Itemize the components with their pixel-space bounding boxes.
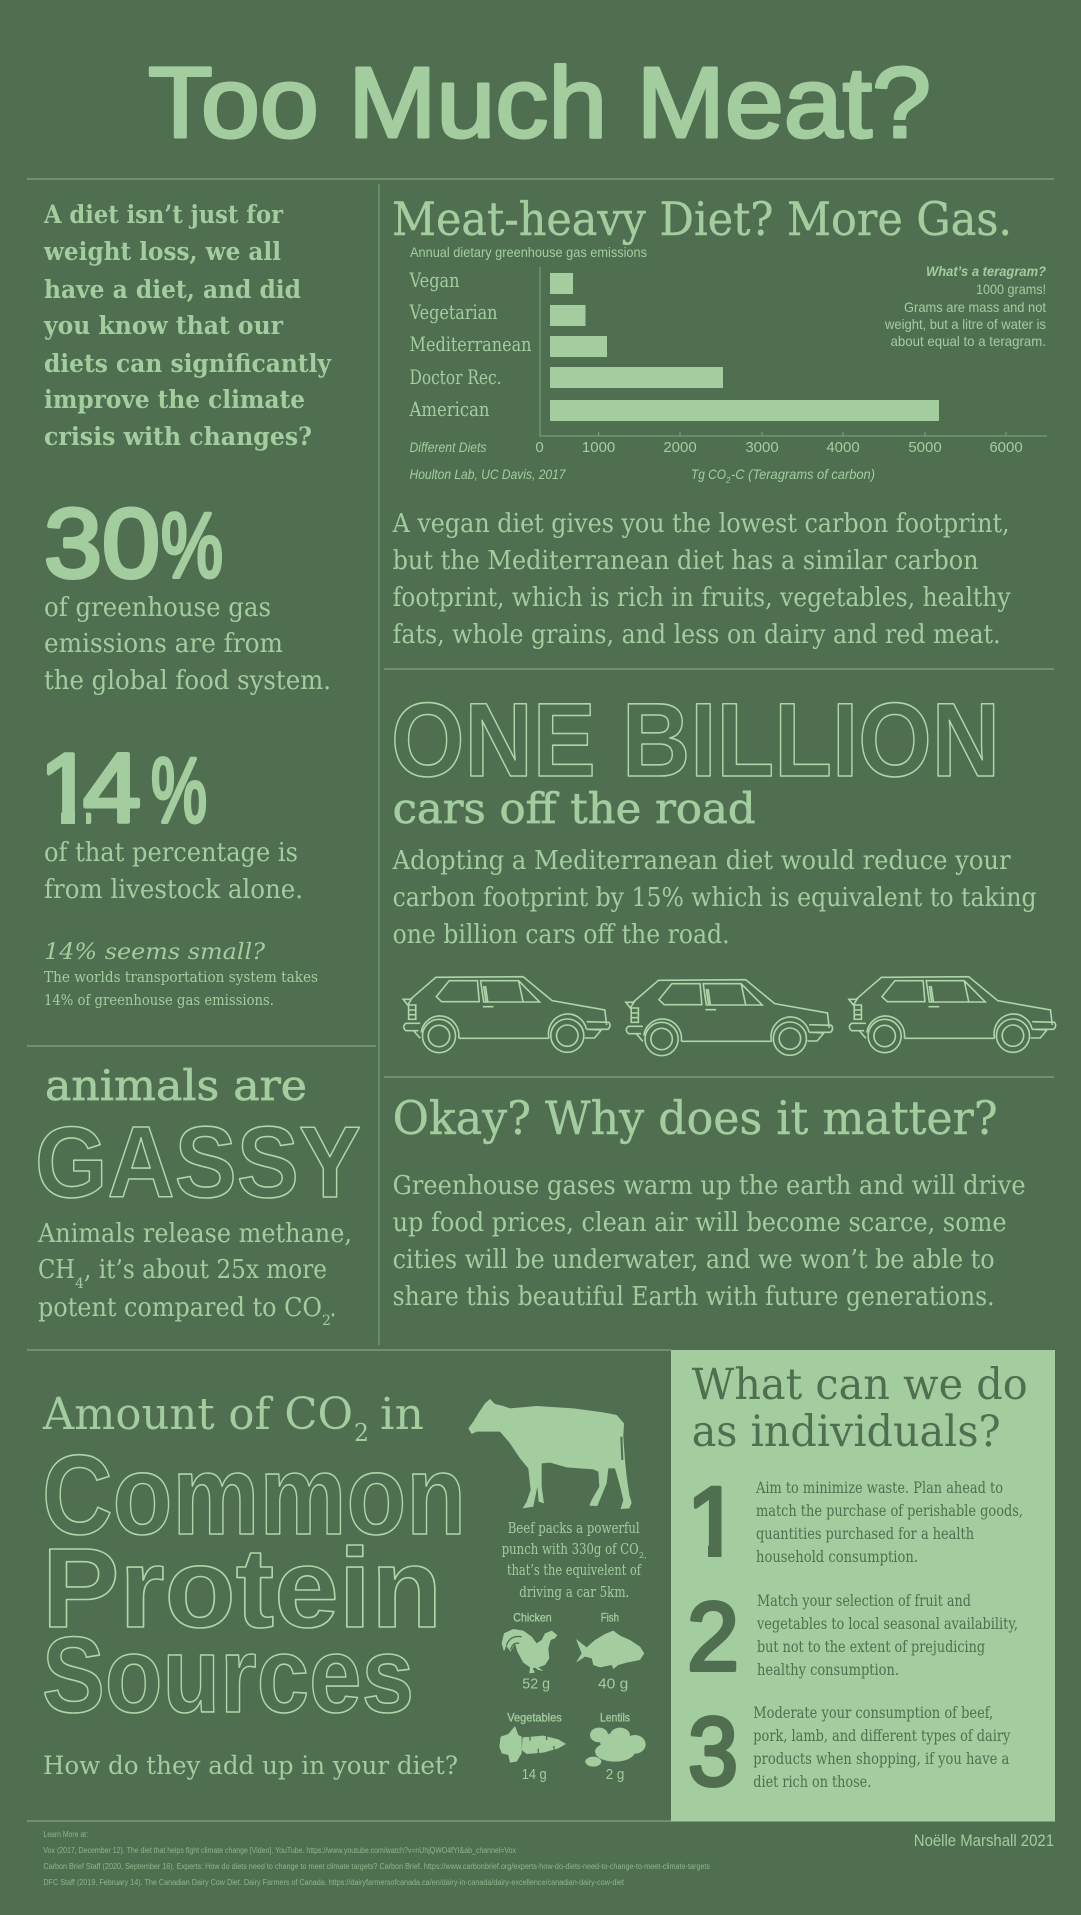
callout: what's a teragram: Grams are mass and not	[904, 299, 1046, 315]
step 2: but not to the extent of prejudicing	[757, 1638, 985, 1656]
text block: greenhouse gases: Greenhouse gases warm up the earth and will drive	[393, 1171, 1026, 1201]
axis tick labels: 4000	[826, 439, 860, 456]
outlined heading: common protein sources	[42, 1432, 466, 1735]
axis captions: 2	[725, 476, 731, 485]
panel heading: What can we do	[692, 1360, 1028, 1410]
axis tick labels: 0	[535, 439, 544, 456]
protein item: vegetables: 14 g	[522, 1766, 547, 1783]
sources list	[43, 1830, 710, 1887]
intro text block: A diet isn’t just for	[43, 200, 284, 229]
outlined heading: gassy: GASSY	[35, 1107, 361, 1219]
icon: car	[403, 977, 610, 1053]
text block: greenhouse gases: up food prices, clean air will become scarce, some	[393, 1208, 1007, 1238]
title: Too Much Meat?	[148, 47, 931, 159]
callout: what's a teragram	[884, 263, 1046, 349]
panel heading: as individuals?	[692, 1407, 1001, 1457]
sources list: Carbon Brief Staff (2020, September 16). Experts: How do diets need to change to meet climate targets? Carbon Brief. https://www.carbonbrief.org/experts-how-do-diets-need-to-change-to-meet-climate-targets	[43, 1862, 710, 1871]
intro text block: weight loss, we all	[43, 237, 281, 266]
bars	[550, 273, 939, 421]
outlined heading: common protein sources: Common	[42, 1432, 466, 1558]
step 1	[684, 1467, 1023, 1576]
methane text block	[37, 1219, 352, 1329]
step 2: Match your selection of fruit and	[757, 1592, 971, 1610]
category labels: American	[409, 397, 490, 421]
text block: mediterranean diet	[392, 846, 1037, 950]
callout: what's a teragram: 1000 grams!	[976, 281, 1046, 297]
protein item: chicken: 52 g	[522, 1676, 550, 1692]
axis tick labels: 5000	[908, 439, 942, 456]
protein item: fish	[576, 1610, 644, 1692]
stat: 14 percent: 4	[83, 733, 141, 843]
sources list: Learn More at:	[43, 1830, 88, 1839]
text block: vegan diet	[392, 509, 1011, 650]
step 3: 3	[688, 1697, 738, 1806]
protein item: vegetables: Vegetables	[507, 1711, 562, 1725]
heading: amount of CO2: in	[380, 1389, 424, 1440]
callout: 14 percent seems small: 14% of greenhouse gas emissions.	[44, 991, 274, 1009]
text block: beef: that’s the equivelent of	[507, 1561, 642, 1579]
callout: 14 percent seems small: 14% seems small?	[44, 940, 265, 965]
axes	[540, 267, 1047, 436]
stat: 14 percent: of that percentage is	[44, 838, 298, 868]
text block: vegan diet: but the Mediterranean diet has a similar carbon	[393, 546, 979, 576]
stat: 14 percent: %	[151, 740, 207, 842]
protein item: chicken: Chicken	[513, 1610, 552, 1624]
panel: animals are gassy	[35, 1061, 361, 1329]
icon: three cars	[403, 977, 1056, 1056]
text block: vegan diet: footprint, which is rich in fruits, vegetables, healthy	[393, 583, 1011, 613]
text block: beef: Beef packs a powerful	[508, 1519, 640, 1537]
text block: greenhouse gases: share this beautiful Earth with future generations.	[393, 1282, 995, 1312]
protein item: lentils: 2 g	[606, 1766, 624, 1783]
outlined heading: one billion: ONE BILLION	[391, 682, 1000, 799]
category labels: Vegan	[409, 268, 460, 292]
stat: 30 percent	[44, 488, 331, 696]
icon: car	[849, 977, 1056, 1053]
text block: beef: 2,	[639, 1551, 647, 1560]
step 3: diet rich on those.	[753, 1773, 871, 1791]
step 3: products when shopping, if you have a	[753, 1750, 1009, 1768]
category labels: Vegetarian	[409, 300, 498, 324]
outlined heading: common protein sources: Protein	[42, 1525, 442, 1651]
text block: vegan diet: A vegan diet gives you the lowest carbon footprint,	[392, 509, 1010, 539]
step 1: household consumption.	[756, 1548, 918, 1566]
heading: why does it matter: Okay? Why does it matter?	[393, 1091, 998, 1145]
step 2: 2	[687, 1582, 739, 1691]
chart title: Annual dietary greenhouse gas emissions	[410, 244, 647, 260]
icon: cow	[468, 1399, 632, 1509]
step 1: match the purchase of perishable goods,	[756, 1502, 1023, 1520]
methane text block: 2	[322, 1313, 331, 1329]
intro text block: have a diet, and did	[44, 275, 301, 304]
text block: mediterranean diet: one billion cars off the road.	[393, 920, 730, 950]
protein item: lentils	[585, 1711, 646, 1783]
axis captions: Different Diets	[410, 439, 486, 455]
axis tick labels	[535, 439, 1023, 456]
icon: car	[626, 980, 833, 1056]
callout: what's a teragram: What’s a teragram?	[926, 263, 1046, 279]
stat: 14 percent: 1	[40, 733, 94, 843]
heading: animals are: animals are	[45, 1061, 307, 1110]
methane text block: 4	[75, 1276, 84, 1292]
stat: 30 percent: %	[161, 495, 223, 597]
callout: 14 percent seems small: The worlds transportation system takes	[44, 968, 318, 986]
bar chart: annual dietary emissions	[409, 244, 1047, 485]
axis captions: Houlton Lab, UC Davis, 2017	[410, 466, 567, 482]
step 1: 1	[686, 1467, 740, 1576]
intro text block: crisis with changes?	[44, 422, 312, 451]
stat: 30 percent: the global food system.	[44, 666, 331, 696]
step 2	[687, 1582, 1018, 1691]
credit: Noëlle Marshall 2021	[914, 1831, 1054, 1850]
axis tick labels: 3000	[745, 439, 779, 456]
axis tick labels: 2000	[663, 439, 697, 456]
intro text block	[43, 200, 332, 451]
protein item: fish: Fish	[601, 1610, 619, 1624]
step 1: Aim to minimize waste. Plan ahead to	[755, 1479, 1003, 1497]
methane text block: .	[330, 1293, 336, 1323]
axis captions: -C (Teragrams of carbon)	[731, 466, 875, 482]
category labels: Mediterranean	[410, 332, 532, 356]
axis tick labels: 1000	[582, 439, 615, 456]
heading: amount of CO2: Amount of CO	[42, 1389, 353, 1440]
methane text block: CH	[38, 1255, 75, 1285]
stat: 30 percent: emissions are from	[44, 629, 283, 659]
step 3	[688, 1697, 1010, 1806]
axis tick labels: 6000	[989, 439, 1023, 456]
stat: 30 percent: of greenhouse gas	[44, 593, 271, 623]
step 2: vegetables to local seasonal availability,	[756, 1615, 1018, 1633]
intro text block: you know that our	[43, 311, 284, 340]
protein item: fish: 40 g	[598, 1676, 628, 1692]
text block: greenhouse gases: cities will be underwater, and we won’t be able to	[393, 1245, 995, 1275]
axis captions	[410, 439, 875, 485]
stat: 30 percent: 30	[44, 488, 160, 598]
subheading: cars off the road: cars off the road	[393, 784, 756, 833]
axis captions: Tg CO	[691, 466, 726, 482]
category labels: Doctor Rec.	[410, 365, 502, 389]
heading: amount of CO2: 2	[354, 1419, 369, 1447]
step 2: healthy consumption.	[757, 1661, 899, 1679]
sources list: Vox (2017, December 12). The diet that helps fight climate change [Video]. YouTube. https://www.youtube.com/watch?v=nUhjQWO4fYI&ab_channel=Vox	[43, 1846, 516, 1855]
panel: what can we do	[671, 1350, 1055, 1822]
methane text block: Animals release methane,	[37, 1219, 352, 1249]
stat: 14 percent: from livestock alone.	[44, 875, 303, 905]
stat: 14 percent	[39, 733, 303, 905]
text block: vegan diet: fats, whole grains, and less on dairy and red meat.	[393, 620, 1001, 650]
text block: beef: punch with 330g of CO	[502, 1540, 639, 1558]
text block: mediterranean diet: Adopting a Mediterranean diet would reduce your	[392, 846, 1011, 876]
step 3: pork, lamb, and different types of dairy	[753, 1727, 1010, 1745]
callout: what's a teragram: weight, but a litre of water is	[884, 316, 1046, 332]
heading: meat-heavy diet: Meat-heavy Diet? More Gas.	[392, 192, 1012, 246]
intro text block: diets can significantly	[44, 349, 332, 378]
methane text block: potent compared to CO	[38, 1293, 322, 1323]
text: how do they add up: How do they add up in your diet?	[43, 1751, 458, 1780]
panel heading	[692, 1360, 1028, 1457]
step 3: Moderate your consumption of beef,	[753, 1704, 993, 1722]
callout: 14 percent seems small	[44, 940, 318, 1009]
category labels	[409, 268, 532, 421]
sources list: DFC Staff (2019, February 14). The Canadian Dairy Cow Diet. Dairy Farmers of Canada. https://dairyfarmersofcanada.ca/en/dairy-in-canada/dairy-excellence/canadian-dairy-cow-diet	[43, 1878, 625, 1887]
text block: greenhouse gases	[393, 1171, 1026, 1312]
protein item: lentils: Lentils	[600, 1711, 630, 1725]
protein item: chicken	[502, 1610, 557, 1692]
step 1: quantities purchased for a health	[756, 1525, 974, 1543]
intro text block: improve the climate	[44, 385, 305, 414]
text block: beef: driving a car 5km.	[519, 1583, 629, 1601]
outlined heading: common protein sources: Sources	[42, 1614, 414, 1735]
text block: beef	[502, 1519, 647, 1601]
methane text block: , it’s about 25x more	[84, 1255, 327, 1285]
protein item: vegetables	[499, 1711, 566, 1783]
callout: what's a teragram: about equal to a teragram.	[890, 333, 1046, 349]
